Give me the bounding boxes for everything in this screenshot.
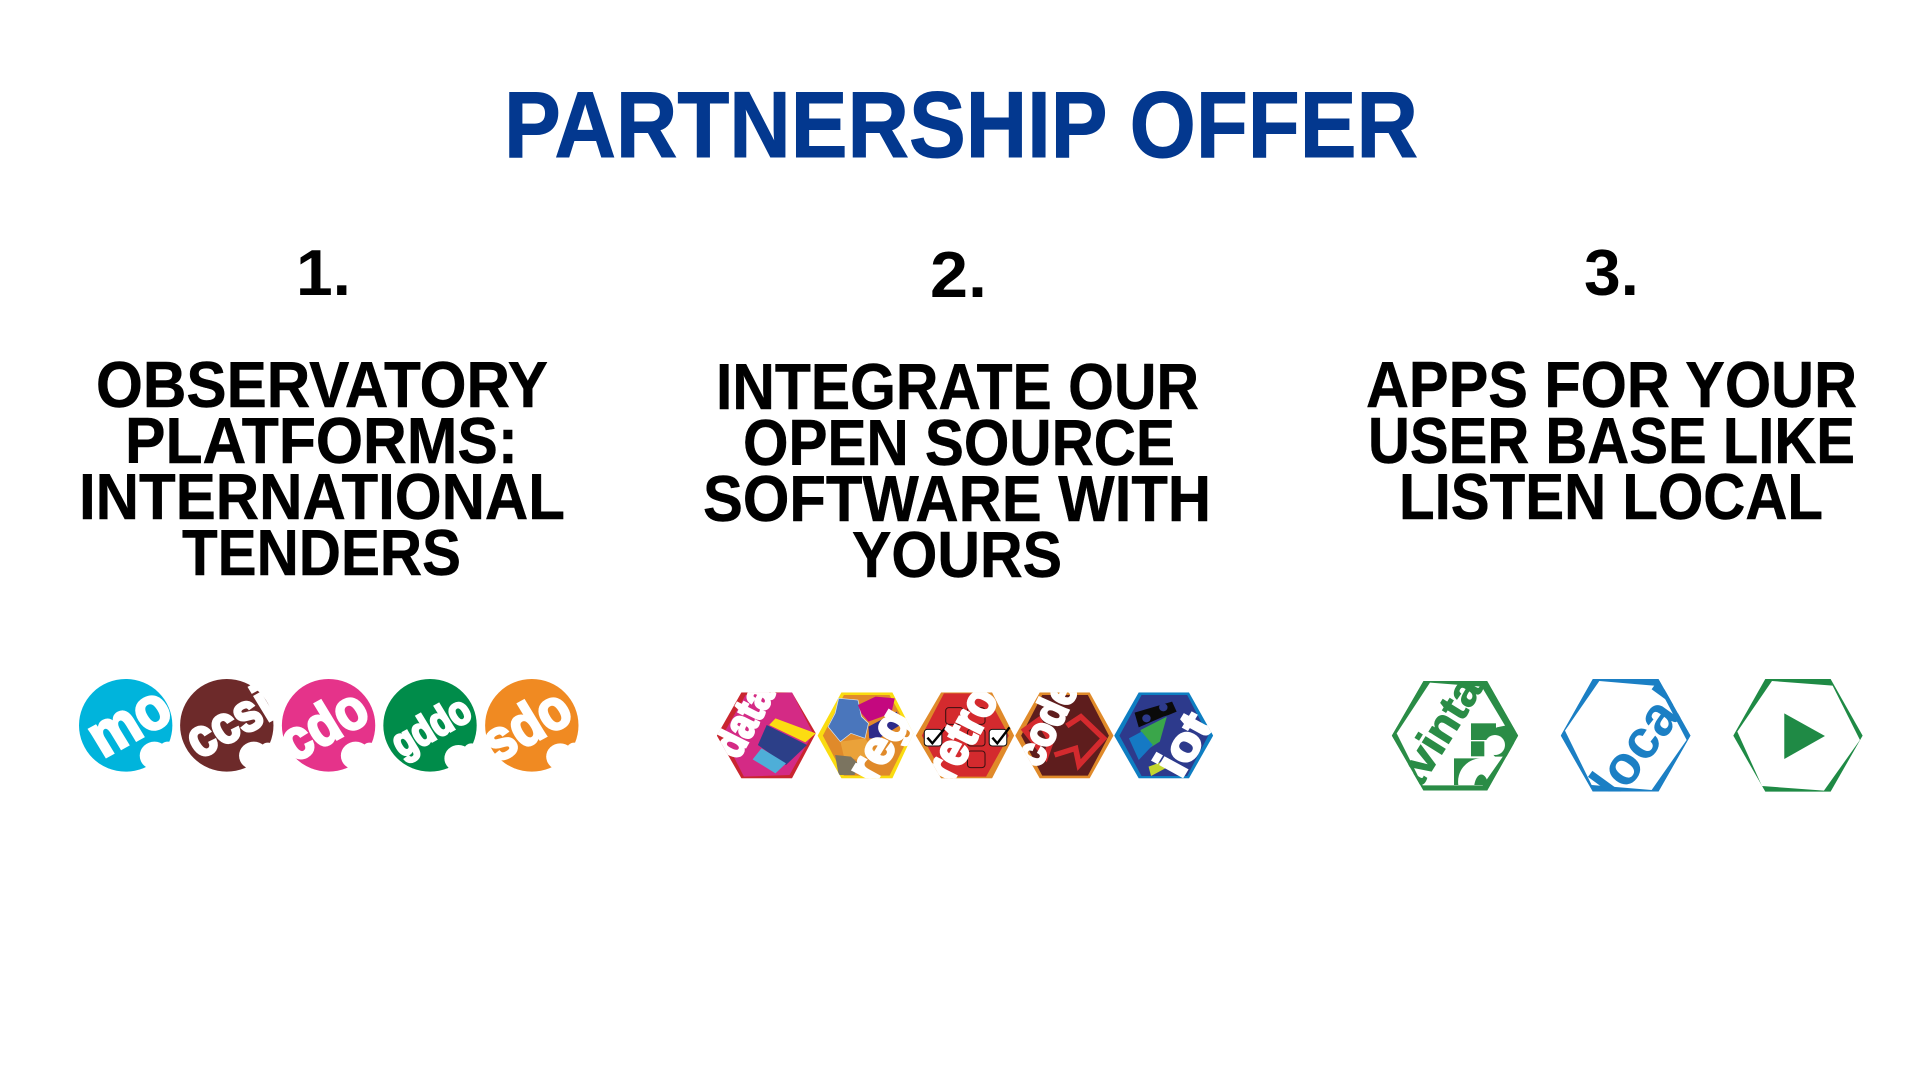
heading: integrate open source: SOFTWARE WITH <box>703 462 1211 535</box>
panel: open source software <box>703 238 1223 790</box>
icon: gddo: gddo <box>383 687 479 766</box>
icon: vinta <box>1392 681 1518 790</box>
icon: vinta: avinta <box>1381 667 1492 805</box>
heading: integrate open source: INTEGRATE OUR <box>716 350 1199 423</box>
icon row: observatory logos <box>75 672 583 774</box>
number 3: 3. <box>1584 236 1639 309</box>
number 1: 1. <box>296 236 351 309</box>
number 2: 2. <box>930 238 987 311</box>
icon: local <box>1560 679 1690 792</box>
icon: code: code <box>1004 673 1088 773</box>
icon: data <box>716 692 816 778</box>
heading: observatory platforms: PLATFORMS: <box>125 404 518 477</box>
icon: cdo: cdo <box>267 676 380 774</box>
panel: apps <box>1366 236 1863 810</box>
heading: apps for your user base: LISTEN LOCAL <box>1399 460 1823 533</box>
icon: play <box>1733 679 1863 792</box>
icon: local: local <box>1578 674 1700 810</box>
icon: reg <box>818 692 914 778</box>
icon: code <box>1015 692 1114 778</box>
icon: retro: retro <box>914 679 1009 789</box>
heading: apps for your user base: APPS FOR YOUR <box>1366 348 1857 421</box>
heading: observatory platforms: TENDERS <box>182 516 461 589</box>
icon: mo: mo <box>75 672 183 770</box>
panel: observatory platforms <box>75 236 583 774</box>
heading: observatory platforms: OBSERVATORY <box>96 348 548 421</box>
heading: observatory platforms <box>79 348 565 589</box>
icon row: software hexagons <box>716 692 1214 778</box>
icon: ccsi: ccsi <box>173 674 284 770</box>
heading: integrate open source: YOURS <box>852 518 1062 591</box>
heading: integrate open source <box>703 350 1211 591</box>
heading: apps for your user base: USER BASE LIKE <box>1368 404 1855 477</box>
icon row: app hexagons <box>1392 679 1863 792</box>
icon: iot: iot <box>1144 704 1223 784</box>
heading: integrate open source: OPEN SOURCE <box>743 406 1175 479</box>
heading: observatory platforms: INTERNATIONAL <box>79 460 565 533</box>
icon: sdo: sdo <box>470 676 583 774</box>
heading: apps for your user base <box>1366 348 1857 533</box>
title: PARTNERSHIP OFFER <box>504 72 1418 177</box>
icon: data: data <box>703 676 785 765</box>
icon: reg: reg <box>836 700 923 790</box>
icon: iot <box>1114 692 1214 778</box>
